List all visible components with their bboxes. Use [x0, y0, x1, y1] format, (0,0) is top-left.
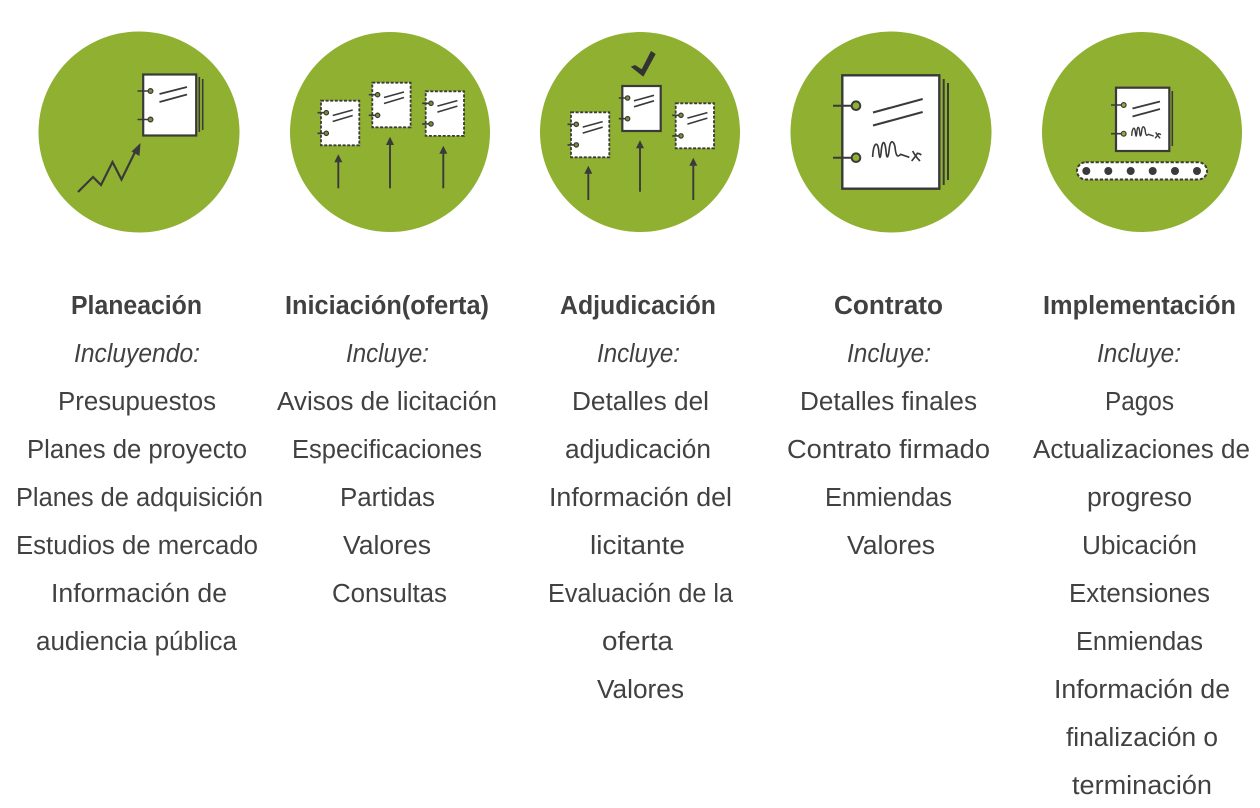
list items: progreso — [1087, 484, 1192, 512]
heading: Adjudicación — [560, 292, 716, 320]
list items: Enmiendas — [1076, 628, 1203, 656]
list items: Presupuestos — [58, 388, 216, 416]
list items: Extensiones — [1069, 580, 1210, 608]
heading: Planeación — [71, 292, 202, 320]
list items: Valores — [847, 532, 935, 560]
icon: planning circle — [38, 32, 240, 232]
heading: Implementación — [1043, 292, 1236, 320]
list items: terminación — [1072, 772, 1212, 800]
column: Iniciación — [277, 292, 497, 608]
list items: Información de — [1054, 676, 1230, 704]
subheading: Incluye: — [1097, 340, 1181, 368]
signature — [873, 142, 921, 161]
icon: check mark — [631, 51, 656, 77]
column: Planeación — [16, 292, 263, 656]
list items: Actualizaciones de — [1033, 436, 1250, 464]
list items: Información del — [549, 484, 732, 512]
subheading: Incluye: — [847, 340, 931, 368]
list items: Pagos — [1105, 388, 1174, 416]
list items: Especificaciones — [292, 436, 482, 464]
list items: Planes de proyecto — [27, 436, 247, 464]
list items: Avisos de licitación — [277, 388, 497, 416]
icon: tender initiation circle — [290, 32, 490, 232]
subheading: Incluye: — [597, 340, 680, 368]
icon: contract circle — [790, 32, 992, 232]
list items: Evaluación de la — [548, 580, 734, 608]
conveyor belt — [1077, 162, 1207, 180]
list items: Enmiendas — [825, 484, 952, 512]
list items: Partidas — [340, 484, 435, 512]
list items: Valores — [597, 676, 684, 704]
list items — [548, 388, 734, 704]
heading: Contrato — [834, 292, 943, 320]
list items: Información de — [51, 580, 227, 608]
list items — [16, 388, 263, 656]
icon: award circle — [540, 32, 740, 232]
list items: Ubicación — [1082, 532, 1197, 560]
list items — [277, 388, 497, 608]
list items: licitante — [590, 532, 685, 560]
subheading: Incluyendo: — [74, 340, 200, 368]
column: Contrato — [787, 292, 990, 560]
column: Implementación — [1033, 292, 1250, 800]
list items: Valores — [343, 532, 431, 560]
list items: audiencia pública — [36, 628, 238, 656]
list items: Consultas — [332, 580, 447, 608]
heading: Iniciación(oferta) — [285, 292, 489, 320]
list items: Contrato firmado — [787, 436, 990, 464]
icon: implementation circle — [1042, 32, 1242, 232]
list items: Planes de adquisición — [16, 484, 263, 512]
list items — [1033, 388, 1250, 800]
list items: adjudicación — [565, 436, 711, 464]
list items — [787, 388, 990, 560]
list items: Detalles finales — [800, 388, 977, 416]
subheading: Incluye: — [346, 340, 429, 368]
list items: Detalles del — [572, 388, 709, 416]
list items: oferta — [602, 628, 674, 656]
signature — [1132, 127, 1161, 138]
list items: finalización o — [1066, 724, 1218, 752]
list items: Estudios de mercado — [16, 532, 258, 560]
column: Adjudicación — [548, 292, 734, 704]
